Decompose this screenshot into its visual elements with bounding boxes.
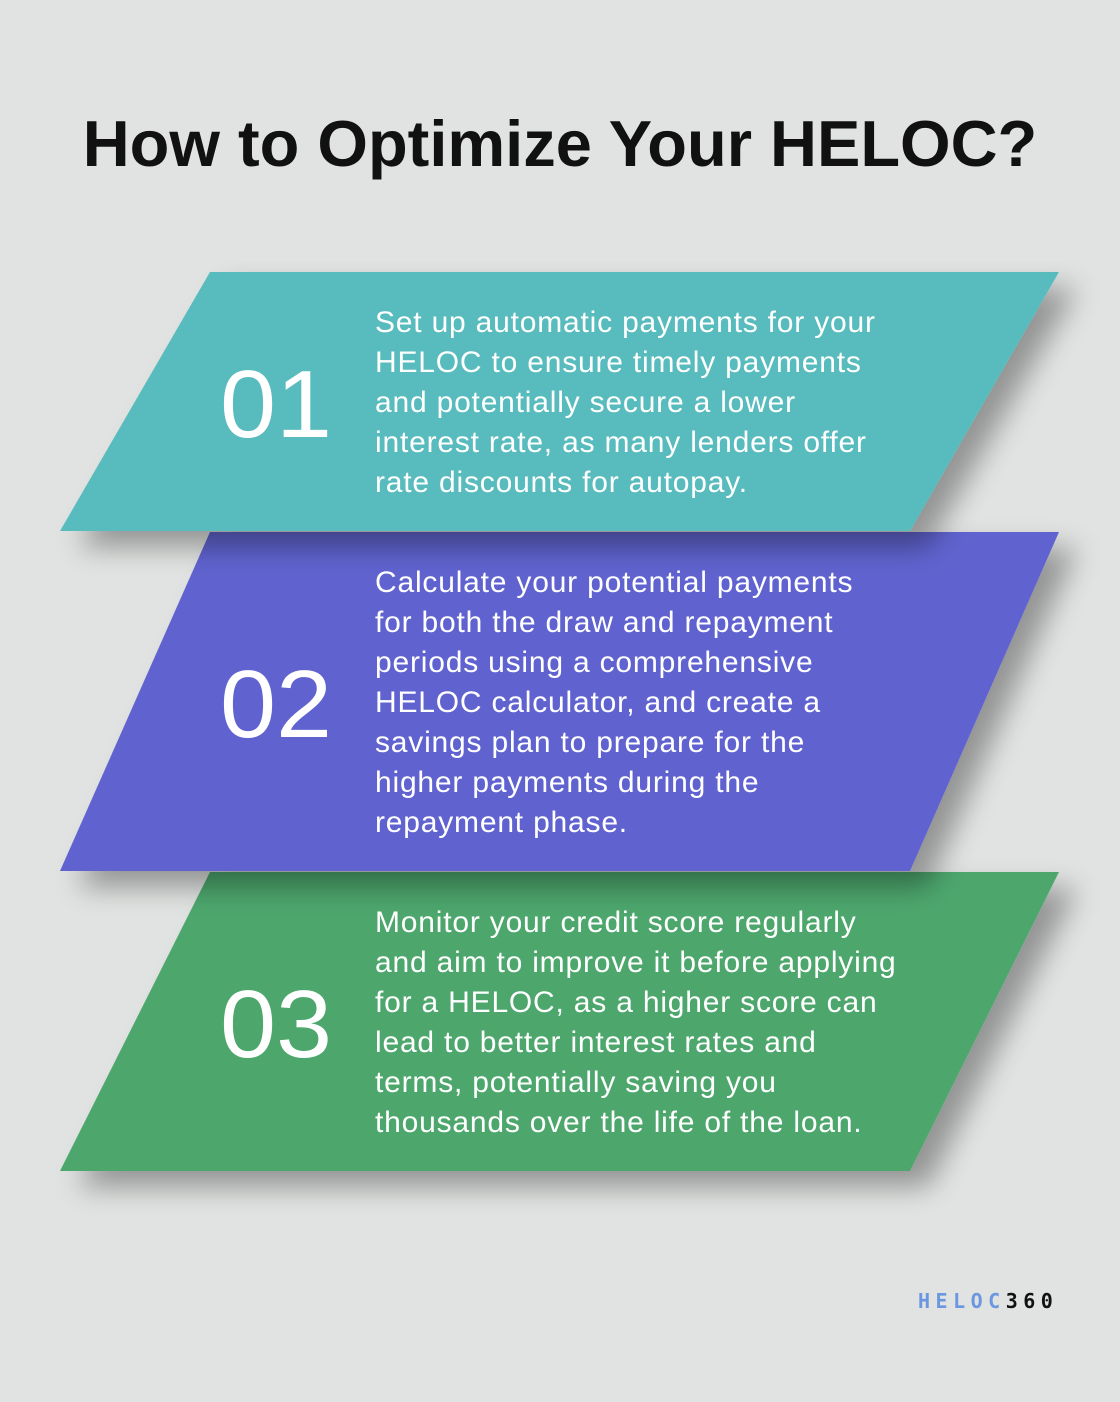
title: How to Optimize Your HELOC? [83,107,1037,180]
step 02 text: repayment phase. [375,806,628,839]
step 03 text: terms, potentially saving you [375,1066,777,1099]
step 03 text: lead to better interest rates and [375,1026,817,1059]
band 3 [60,872,1059,1171]
step 01 text [375,306,876,499]
step 01 text: and potentially secure a lower [375,386,796,419]
step 02 text: higher payments during the [375,766,759,799]
step 01 text: interest rate, as many lenders offer [375,426,867,459]
step 03 text: for a HELOC, as a higher score can [375,986,877,1019]
step 02 text [375,566,853,839]
step 01 text: Set up automatic payments for your [375,306,876,339]
step 03 text [375,906,897,1139]
band 2 [60,532,1059,871]
step 02 text: periods using a comprehensive [375,646,813,679]
step 01 text: HELOC to ensure timely payments [375,346,862,379]
logo: HELOC360 [918,1289,1058,1313]
step 01 text: rate discounts for autopay. [375,466,748,499]
step 02 number: 02 [220,651,332,758]
step 02 text: Calculate your potential payments [375,566,853,599]
step 02 text: for both the draw and repayment [375,606,833,639]
band 1 [60,272,1059,531]
step 03 text: and aim to improve it before applying [375,946,897,979]
step 03 text: thousands over the life of the loan. [375,1106,862,1139]
step 02 text: HELOC calculator, and create a [375,686,821,719]
step 03 text: Monitor your credit score regularly [375,906,857,939]
step 01 number: 01 [220,351,332,458]
step 03 number: 03 [220,971,332,1078]
step 02 text: savings plan to prepare for the [375,726,805,759]
